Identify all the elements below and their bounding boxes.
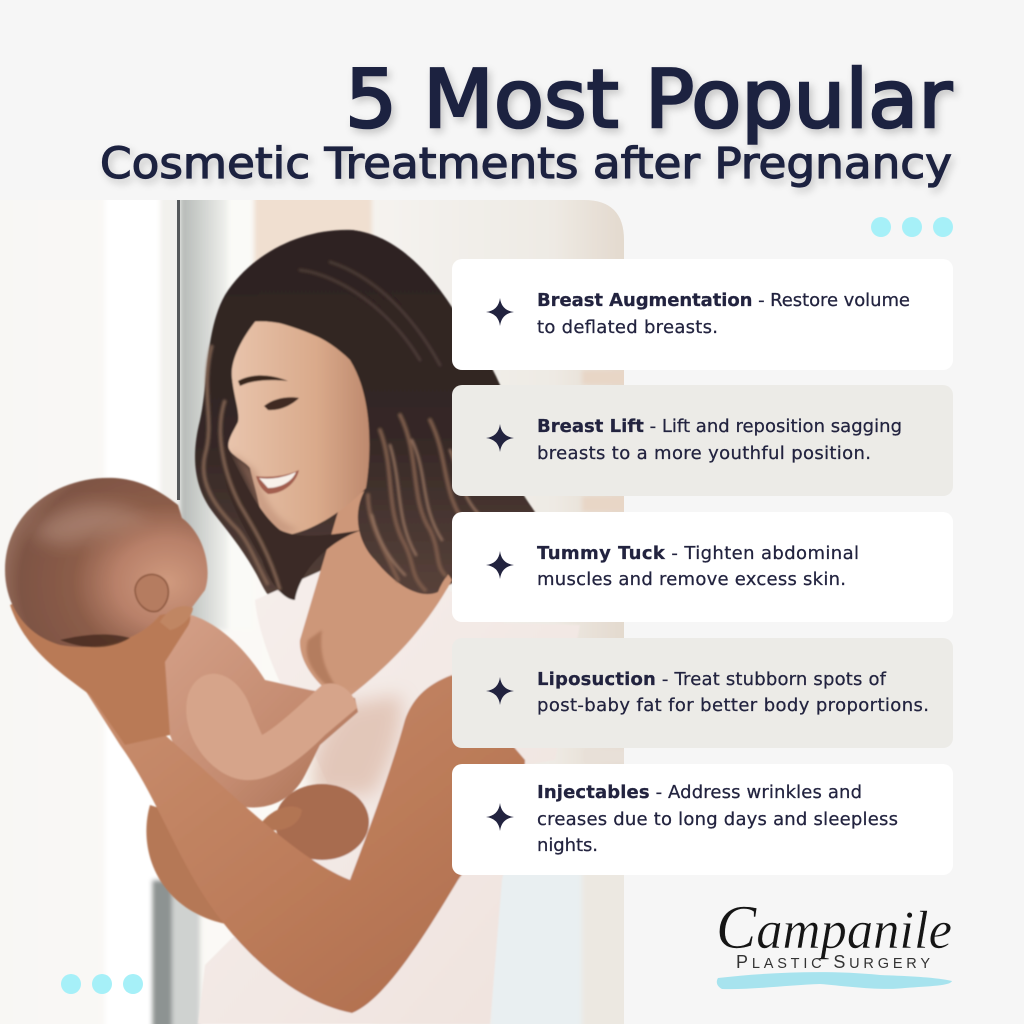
card: Breast Augmentation: to deflated breasts. (537, 317, 718, 338)
decorative dots: top right (871, 217, 953, 237)
card: Liposuction: post-baby fat for better body proportions. (537, 695, 929, 716)
card: Liposuction (452, 638, 953, 748)
logo: Campanile Plastic Surgery: P LASTIC S URGERY (736, 952, 930, 972)
title (100, 53, 952, 189)
card: Tummy Tuck (452, 512, 953, 622)
photo: mother holding baby (0, 190, 630, 1024)
left hair waves (204, 345, 280, 590)
shirt (198, 570, 526, 1024)
hair front (254, 230, 452, 595)
baby leg (275, 784, 369, 860)
baby arm (186, 674, 357, 780)
title: Cosmetic Treatments after Pregnancy (100, 139, 952, 189)
eyebrow (238, 375, 288, 386)
baby ear (135, 574, 168, 612)
card: Injectables: creases due to long days and sleepless (537, 809, 898, 830)
mother's finger (160, 606, 193, 630)
card: Breast Augmentation: Breast Augmentation - Restore volume (537, 290, 910, 311)
hair back (195, 230, 535, 611)
card: Breast Lift (452, 385, 953, 496)
card: Breast Augmentation (452, 259, 953, 370)
baby body (162, 612, 358, 807)
hair strands (300, 262, 490, 590)
card: Liposuction: Liposuction - Treat stubborn spots of (537, 669, 887, 690)
card: Tummy Tuck: muscles and remove excess skin. (537, 569, 846, 590)
title: 5 Most Popular (345, 53, 952, 146)
decorative dots: bottom left (61, 974, 143, 994)
near arm (85, 675, 525, 1013)
card: Breast Lift: Breast Lift - Lift and reposition sagging (537, 416, 902, 437)
far arm (145, 804, 224, 924)
card: Breast Lift: breasts to a more youthful position. (537, 443, 871, 464)
smile (256, 470, 299, 494)
baby head (5, 478, 208, 647)
card: Injectables (452, 764, 953, 875)
eye (264, 397, 299, 410)
neck and chest skin (299, 490, 452, 696)
window frame line (177, 200, 180, 500)
mother's thumb on baby (262, 806, 302, 830)
hand under baby head (10, 594, 190, 745)
card: Injectables: Injectables - Address wrinkles and (537, 782, 862, 803)
breast shading (311, 695, 401, 795)
face (228, 318, 378, 535)
card: Injectables: nights. (537, 835, 598, 856)
card: Tummy Tuck: Tummy Tuck - Tighten abdominal (537, 543, 859, 564)
diaper (155, 795, 192, 826)
logo: Campanile Plastic Surgery: Campanile (716, 894, 952, 962)
